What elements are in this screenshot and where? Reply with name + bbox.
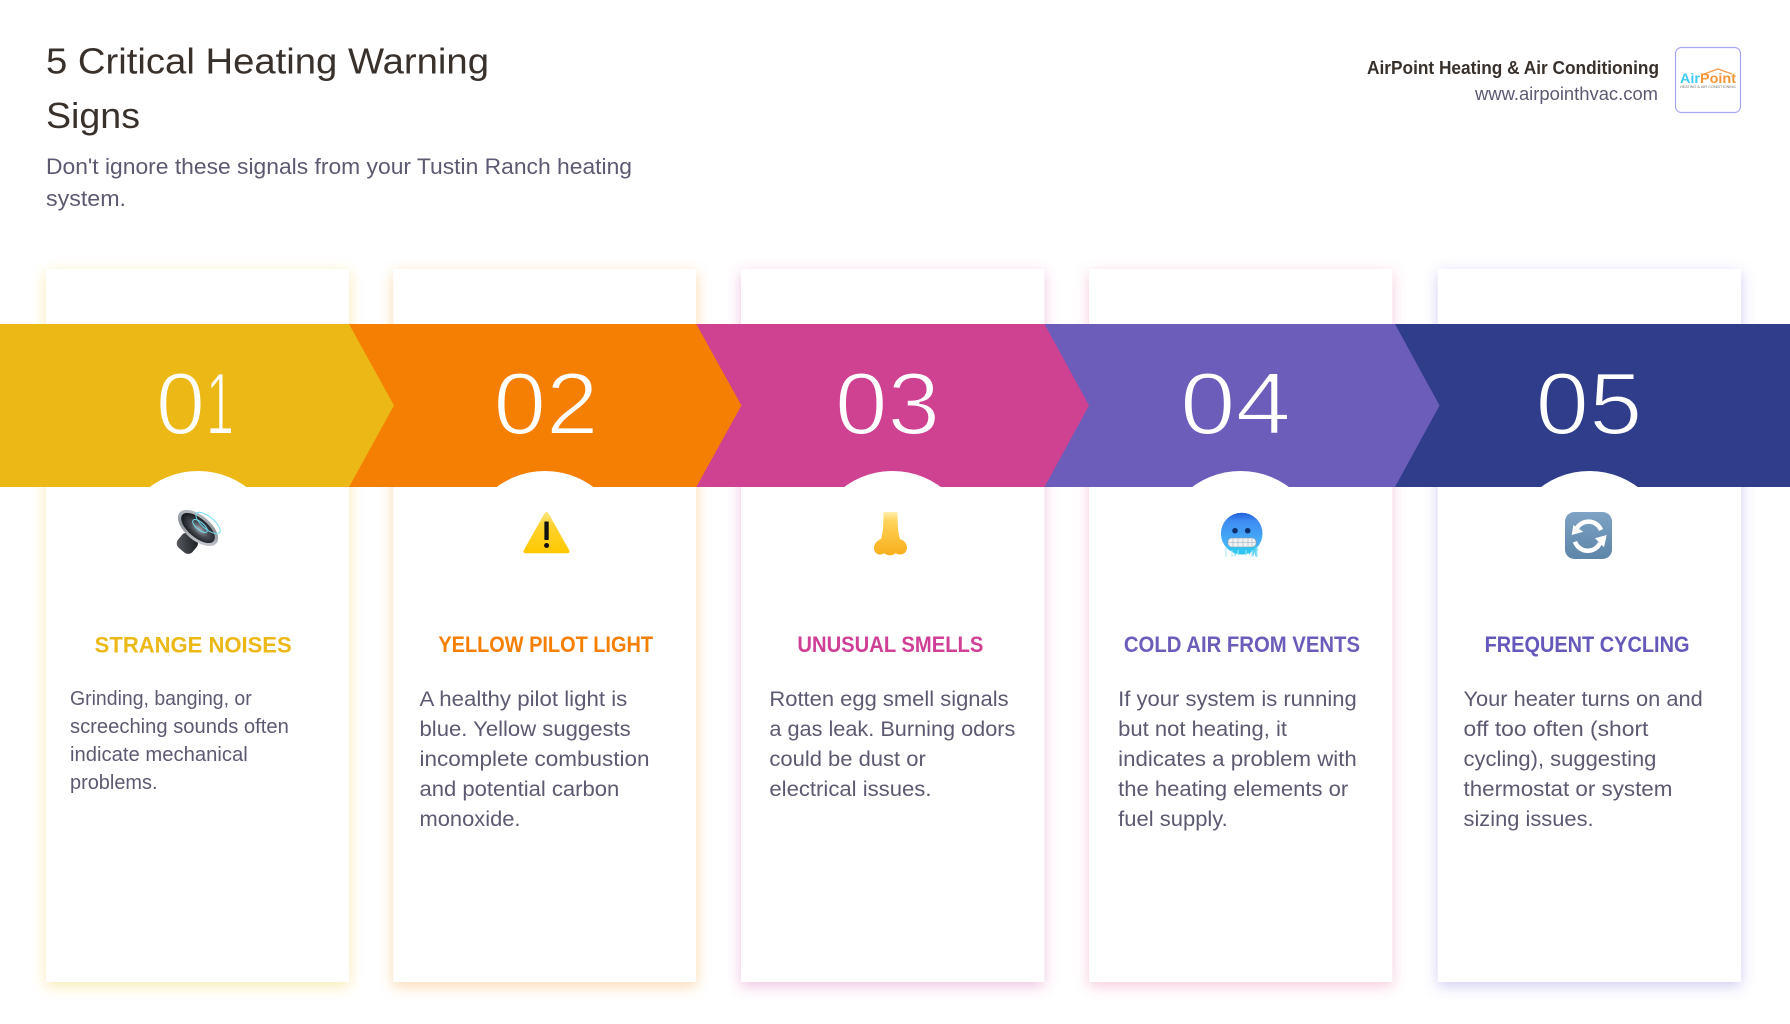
body text: Grinding, banging, or xyxy=(70,688,252,710)
chevron number band xyxy=(0,324,1790,487)
title: 5 Critical Heating Warning xyxy=(46,40,489,82)
card background 5 xyxy=(1438,269,1741,982)
body text xyxy=(1464,687,1703,831)
icon: cycle arrows xyxy=(1565,512,1612,559)
body text: monoxide. xyxy=(420,807,520,831)
body text: off too often (short xyxy=(1464,717,1648,741)
chevron number band: 02 xyxy=(494,354,598,453)
title: Signs xyxy=(46,95,140,136)
chevron number band: 03 xyxy=(835,354,940,453)
heading: STRANGE NOISES xyxy=(95,633,292,658)
chevron number band: 0 xyxy=(156,354,205,453)
company name and website xyxy=(1367,58,1659,104)
body text: fuel supply. xyxy=(1118,807,1228,831)
body text: Rotten egg smell signals xyxy=(769,687,1009,711)
body text: cycling), suggesting xyxy=(1464,747,1656,771)
body text xyxy=(769,687,1015,801)
heading: YELLOW PILOT LIGHT xyxy=(438,632,654,657)
logo box: HEATING & AIR CONDITIONING xyxy=(1680,84,1736,89)
body text: If your system is running xyxy=(1118,687,1357,711)
icon: nose xyxy=(874,512,907,555)
panel: frequent cycling xyxy=(1464,471,1703,831)
logo box xyxy=(1676,48,1740,112)
body text xyxy=(1118,687,1357,831)
icon: warning triangle xyxy=(523,512,570,553)
chevron number band: 1 xyxy=(206,354,234,453)
body text: sizing issues. xyxy=(1464,807,1594,831)
heading: COLD AIR FROM VENTS xyxy=(1124,632,1360,657)
company name and website: www.airpointhvac.com xyxy=(1474,84,1658,104)
card background 1 xyxy=(46,269,349,982)
card background 3 xyxy=(741,269,1044,982)
body text xyxy=(420,687,650,831)
body text: indicates a problem with xyxy=(1118,747,1357,771)
body text: blue. Yellow suggests xyxy=(420,717,631,741)
chevron number band: 05 xyxy=(1536,354,1642,453)
body text: thermostat or system xyxy=(1464,777,1672,801)
panel: cold air from vents xyxy=(1118,471,1360,831)
body text: could be dust or xyxy=(769,747,926,771)
chevron number band: 04 xyxy=(1180,354,1291,453)
icon: freezing face xyxy=(1221,513,1262,558)
subtitle: system. xyxy=(46,186,126,211)
body text: the heating elements or xyxy=(1118,777,1348,801)
body text: but not heating, it xyxy=(1118,717,1287,741)
heading: FREQUENT CYCLING xyxy=(1485,632,1690,657)
body text: Your heater turns on and xyxy=(1464,687,1703,711)
card background 2 xyxy=(393,269,696,982)
icon: speaker xyxy=(172,503,224,556)
subtitle: Don't ignore these signals from your Tustin Ranch heating xyxy=(46,154,632,179)
body text: problems. xyxy=(70,772,158,794)
body text: incomplete combustion xyxy=(420,747,650,771)
company name and website: AirPoint Heating & Air Conditioning xyxy=(1367,58,1659,78)
body text xyxy=(70,688,289,794)
panel: yellow pilot light xyxy=(420,471,654,831)
body text: a gas leak. Burning odors xyxy=(769,717,1015,741)
panel: unusual smells xyxy=(769,471,1015,801)
card background 4 xyxy=(1089,269,1392,982)
heading: UNUSUAL SMELLS xyxy=(797,632,983,657)
panel: strange noises xyxy=(70,471,292,794)
logo box: Air xyxy=(1680,70,1701,86)
body text: electrical issues. xyxy=(769,777,932,801)
logo box: Point xyxy=(1700,70,1736,86)
body text: and potential carbon xyxy=(420,777,619,801)
body text: indicate mechanical xyxy=(70,744,248,766)
body text: A healthy pilot light is xyxy=(420,687,627,711)
subtitle xyxy=(46,154,632,211)
body text: screeching sounds often xyxy=(70,716,289,738)
title xyxy=(46,40,489,136)
